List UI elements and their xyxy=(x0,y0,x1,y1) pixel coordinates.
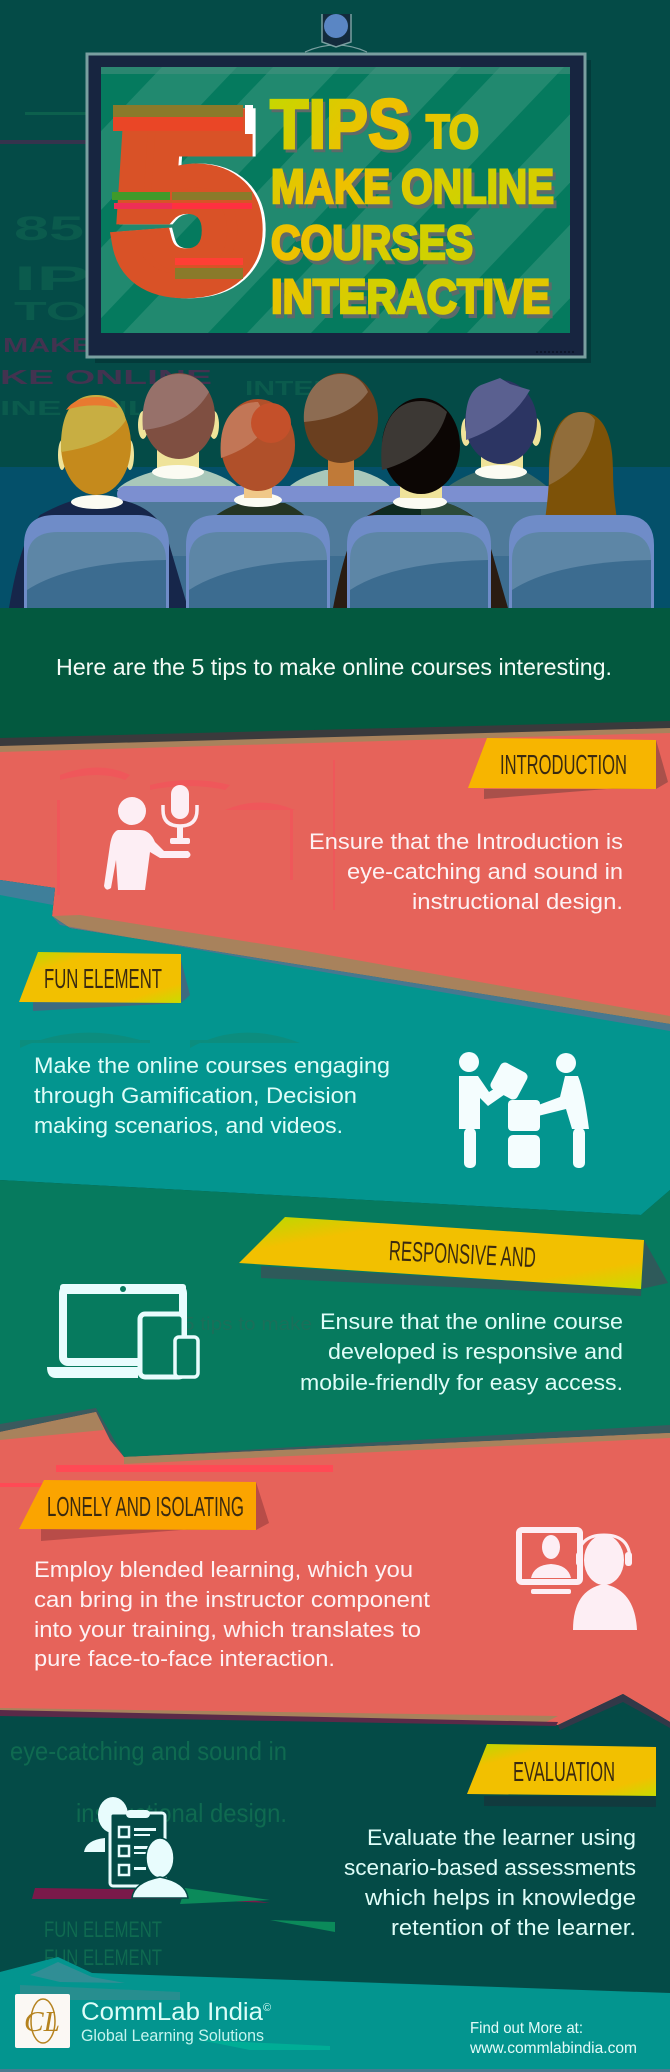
person: back row middle xyxy=(286,373,393,490)
person: front row 3 xyxy=(333,398,508,608)
title: TIPS TO MAKE ONLINE COURSES INTERACTIVE: MAKE ONLINE xyxy=(274,165,557,218)
label: FUN ELEMENT: FUN ELEMENT xyxy=(44,963,162,994)
text: responsive tip: developed is responsive and xyxy=(328,1339,623,1364)
title: TIPS TO MAKE ONLINE COURSES INTERACTIVE: TO xyxy=(426,105,479,158)
ghost text: repeated labels: FUN ELEMENT xyxy=(44,1917,162,1942)
ghost glitch text in the header: TO O xyxy=(14,296,144,326)
ghost glitch text in the header: KE ONLINE xyxy=(0,367,212,389)
text: fun element tip: making scenarios, and videos. xyxy=(34,1113,343,1138)
decorative red strips xyxy=(56,1465,333,1472)
text: fun element tip: Make the online courses engaging xyxy=(34,1053,390,1078)
seat 4 xyxy=(509,515,654,608)
ghost text: repeated labels xyxy=(10,1736,287,1970)
title: TIPS TO MAKE ONLINE COURSES INTERACTIVE: COURSES xyxy=(274,221,476,274)
text: lonely tip: can bring in the instructor component xyxy=(34,1587,430,1612)
background: classroom floor xyxy=(0,467,670,608)
logo text: CommLab India: CommLab India xyxy=(81,1998,263,2026)
seat 3 xyxy=(347,515,491,608)
text: introduction tip xyxy=(309,829,623,914)
person: front row 1 xyxy=(9,395,188,608)
seat 2 xyxy=(186,515,330,608)
back row seats xyxy=(117,486,555,608)
text: evaluation tip: retention of the learner. xyxy=(391,1915,636,1940)
ghost glitch text in the header: MAKE ONLINE xyxy=(3,335,215,357)
text: lonely tip: into your training, which translates to xyxy=(34,1617,421,1642)
person: front row 2 xyxy=(200,399,318,608)
text: fun element tip xyxy=(34,1053,390,1138)
panel: evaluation xyxy=(0,1694,670,2000)
ghost text: repeated labels: FUN ELEMENT xyxy=(44,1945,162,1970)
audience front row xyxy=(9,395,632,608)
text: responsive tip xyxy=(300,1309,623,1395)
icon: ceiling webcam xyxy=(305,14,367,52)
background: classroom wall xyxy=(0,0,670,467)
person: back row left xyxy=(117,373,241,490)
decorative glitch wedges xyxy=(32,1888,270,1903)
text: lonely tip: pure face-to-face interaction. xyxy=(34,1646,335,1671)
title: TIPS TO MAKE ONLINE COURSES INTERACTIVE: TIPS xyxy=(270,85,410,163)
title: TIPS TO MAKE ONLINE COURSES INTERACTIVE xyxy=(270,85,557,328)
text: evaluation tip xyxy=(344,1825,636,1940)
label: LONELY AND ISOLATING xyxy=(19,1480,269,1541)
ghost glitch text in the header: INE ONLINE xyxy=(0,398,212,420)
title: TIPS TO MAKE ONLINE COURSES INTERACTIVE: INTERACTIVE xyxy=(271,271,550,324)
text: evaluation tip: Evaluate the learner using xyxy=(367,1825,636,1850)
audience back row xyxy=(117,373,551,490)
logo text: CommLab India: © xyxy=(263,2002,271,2014)
logo text: CommLab India: Global Learning Solutions xyxy=(81,2026,264,2045)
footer link: Find out More at: xyxy=(470,2020,583,2037)
text: evaluation tip: scenario-based assessments xyxy=(344,1855,636,1880)
front row seats xyxy=(24,515,654,608)
ghost glitch text in the header: INTER xyxy=(245,378,336,400)
ghost text: repeated labels: instructional design. xyxy=(76,1798,287,1828)
ghost text: repeated labels: eye-catching and sound in xyxy=(10,1736,287,1766)
label: RESPONSIVE AND xyxy=(239,1217,668,1296)
panel: fun element xyxy=(0,880,670,1215)
background: intro band xyxy=(0,608,670,778)
footer link xyxy=(469,2020,637,2057)
panel: introduction xyxy=(0,721,670,1024)
title: TIPS TO MAKE ONLINE COURSES INTERACTIVE: INTERACTIVE xyxy=(274,275,553,328)
panel: lonely and isolating xyxy=(0,1408,670,1725)
panel: footer xyxy=(0,1957,670,2072)
label: LONELY AND ISOLATING: LONELY AND ISOLATING xyxy=(47,1491,244,1522)
text: fun element tip: through Gamification, Decision xyxy=(34,1083,357,1108)
label: EVALUATION xyxy=(467,1744,656,1807)
big numeral 5: 5 xyxy=(120,70,260,335)
decorative ghost shapes xyxy=(57,760,335,910)
label: FUN ELEMENT xyxy=(19,952,190,1011)
person: front row 4 xyxy=(530,412,632,608)
icon: presenter with microphone xyxy=(104,785,197,890)
logo: CommLab India mark: CL xyxy=(24,2007,60,2038)
text: lonely tip xyxy=(34,1557,430,1671)
title: TIPS TO MAKE ONLINE COURSES INTERACTIVE: MAKE ONLINE xyxy=(271,161,554,214)
text: lonely tip: Employ blended learning, which you xyxy=(34,1557,413,1582)
logo: CommLab India mark xyxy=(15,1994,70,2048)
label: RESPONSIVE AND: RESPONSIVE AND xyxy=(388,1235,537,1273)
title: TIPS TO MAKE ONLINE COURSES INTERACTIVE: COURSES xyxy=(271,217,473,270)
text: evaluation tip: which helps in knowledge xyxy=(364,1885,636,1910)
ghost glitch text in the header: 85 xyxy=(14,210,84,248)
seat 1 xyxy=(24,515,169,608)
icon: instructor on screen and learner with headset xyxy=(519,1530,637,1630)
ghost glitch text in the header: IPII xyxy=(14,260,134,298)
text: responsive tip: mobile-friendly for easy access. xyxy=(300,1370,623,1395)
decorative ghost bands xyxy=(20,1033,300,1048)
icon: laptop, tablet and phone xyxy=(47,1284,198,1378)
text: introduction tip: Ensure that the Introduction is xyxy=(309,829,623,854)
logo text: CommLab India xyxy=(81,1998,271,2045)
ghost text over the devices: Here are the 5 tips to make xyxy=(62,1314,312,1334)
big numeral 5: 5 xyxy=(117,70,257,335)
title: TIPS TO MAKE ONLINE COURSES INTERACTIVE: TIPS xyxy=(272,88,413,166)
panel: responsive xyxy=(0,1180,670,1470)
footer link: www.commlabindia.com xyxy=(469,2040,637,2057)
text: responsive tip: Ensure that the online course xyxy=(320,1309,623,1334)
icon: learners with checklist xyxy=(84,1797,188,1898)
ghost glitch text in the header xyxy=(0,112,336,420)
intro sentence: Here are the 5 tips to make online courses interesting. xyxy=(56,654,612,680)
text: introduction tip: instructional design. xyxy=(412,889,623,914)
person: back row right xyxy=(444,378,551,490)
icon: two people stacking blocks xyxy=(459,1052,589,1168)
label: INTRODUCTION xyxy=(468,738,668,799)
monitor screen xyxy=(86,52,591,363)
text: introduction tip: eye-catching and sound in xyxy=(347,859,623,884)
